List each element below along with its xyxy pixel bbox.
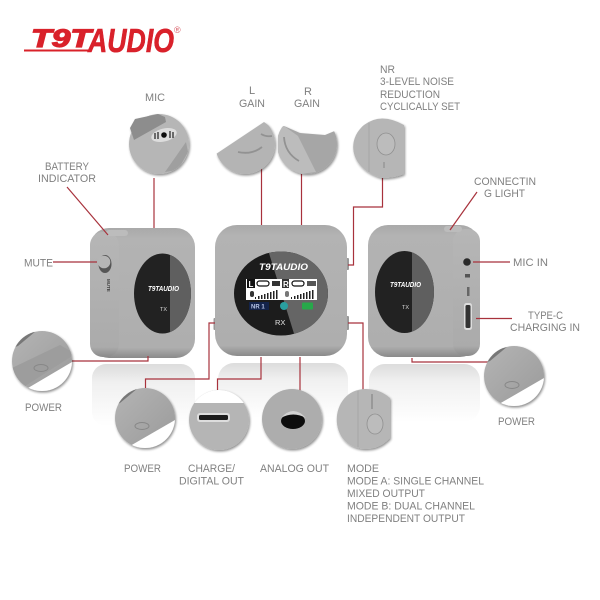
device: left TX — [90, 228, 195, 358]
label: type-c: TYPE-C — [528, 310, 563, 322]
label: charge digital out: DIGITAL OUT — [179, 476, 244, 488]
label: battery indicator: INDICATOR — [38, 173, 96, 185]
device: right TX — [368, 225, 480, 357]
label: mode: MIXED OUTPUT — [347, 488, 425, 500]
device: center RX — [214, 225, 349, 356]
labels — [24, 64, 580, 525]
label: mode — [347, 463, 484, 525]
label: mode: MODE — [347, 463, 379, 475]
label: charge digital out — [179, 463, 244, 488]
mic in jack — [463, 258, 471, 266]
battery indicator — [302, 302, 313, 310]
label: analog out: ANALOG OUT — [260, 463, 329, 475]
TX screen — [134, 254, 191, 334]
label: NR: CYCLICALLY SET — [380, 101, 460, 113]
type-c port — [464, 303, 472, 330]
RX screen: T9TAUDIO — [259, 262, 308, 272]
label: power right: POWER — [498, 416, 535, 428]
label: mode: MODE B: DUAL CHANNEL — [347, 500, 475, 512]
mute label: MUTE — [106, 279, 111, 292]
logo — [24, 22, 181, 59]
label: mode: MODE A: SINGLE CHANNEL — [347, 476, 484, 488]
TX screen: TX — [402, 305, 409, 311]
label: charge digital out: CHARGE/ — [188, 463, 236, 475]
detail: R gain — [278, 126, 337, 174]
detail: mic — [129, 114, 189, 174]
logo: ® — [174, 25, 181, 35]
label: type-c: CHARGING IN — [510, 322, 580, 334]
label: battery indicator — [38, 161, 96, 185]
label: mute: MUTE — [24, 258, 53, 270]
connector lines — [53, 166, 512, 392]
label: connecting light: CONNECTIN — [474, 176, 536, 188]
label: NR: 3-LEVEL NOISE — [380, 76, 454, 88]
reflection: right device — [369, 364, 480, 422]
label: connecting light — [474, 176, 536, 200]
detail: power left — [12, 331, 72, 395]
reflection: left device — [92, 364, 195, 426]
logo: T9T — [31, 25, 95, 53]
detail: L gain — [216, 122, 280, 174]
reflection: center device — [218, 363, 348, 418]
label: L gain — [239, 85, 265, 110]
detail: charge port — [189, 390, 249, 450]
label: NR: NR — [380, 64, 395, 76]
TX screen: T9TAUDIO — [390, 280, 421, 289]
label: type-c — [510, 310, 580, 334]
usb icon — [467, 287, 470, 296]
label: L gain: GAIN — [239, 98, 265, 110]
detail: power right — [484, 346, 544, 408]
label: power center: POWER — [124, 463, 161, 475]
label: NR: REDUCTION — [380, 89, 440, 101]
TX screen: T9TAUDIO — [148, 284, 179, 293]
detail: analog port — [262, 389, 322, 449]
label: mic: MIC — [145, 92, 165, 104]
connection indicator — [280, 302, 288, 310]
label: R gain: R — [304, 86, 312, 98]
NR indicator: NR 1 — [251, 304, 265, 310]
label: NR — [380, 64, 460, 113]
TX screen: TX — [160, 307, 167, 313]
label: mode: INDEPENDENT OUTPUT — [347, 513, 465, 525]
label: R gain: GAIN — [294, 98, 320, 110]
detail: NR button — [353, 118, 404, 178]
label: power left: POWER — [25, 402, 62, 414]
display readout — [246, 279, 317, 300]
label: L gain: L — [249, 85, 255, 97]
label: mic in: MIC IN — [513, 257, 548, 269]
display readout: R — [283, 280, 289, 289]
display readout: L — [248, 280, 254, 289]
TX screen — [375, 251, 434, 333]
mute button — [98, 255, 112, 273]
logo: AUDIO — [87, 22, 174, 59]
detail: mode button — [337, 389, 390, 449]
detail: power center — [115, 388, 175, 450]
RX label: RX — [275, 318, 285, 327]
headset icon — [465, 274, 470, 278]
label: battery indicator: BATTERY — [45, 161, 90, 173]
label: connecting light: G LIGHT — [484, 188, 525, 200]
RX screen — [234, 250, 330, 340]
label: R gain — [294, 86, 320, 110]
